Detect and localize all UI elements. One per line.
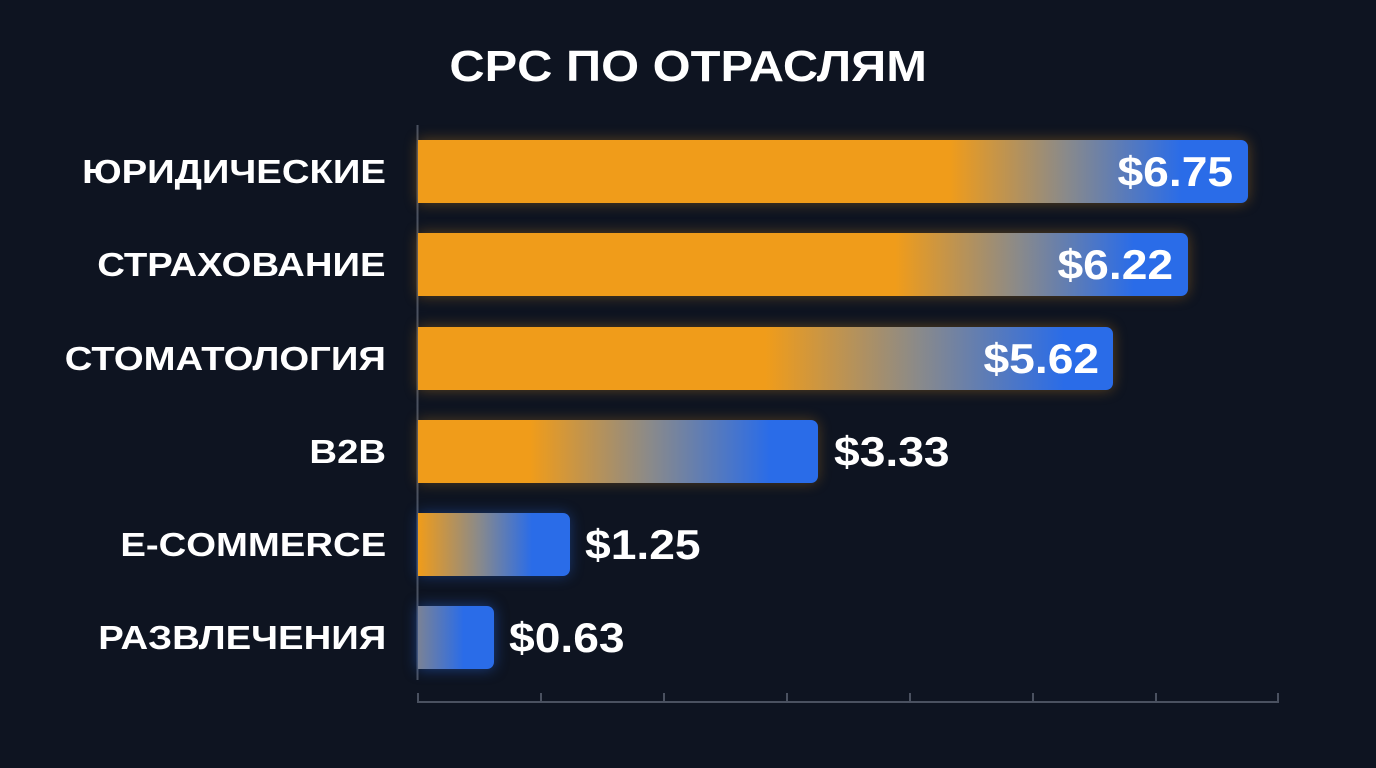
value: 1.25: $1.25 [585, 521, 701, 568]
value: 6.75: $6.75 [1117, 148, 1233, 195]
label: ЮРИДИЧЕСКИЕ: ЮРИДИЧЕСКИЕ [82, 153, 386, 190]
bar: 1.25 [418, 513, 570, 576]
value: 5.62: $5.62 [983, 335, 1099, 382]
bar: 0.63 [418, 606, 494, 669]
bar: 5.62 [418, 327, 1113, 390]
label: СТОМАТОЛОГИЯ: СТОМАТОЛОГИЯ [65, 340, 386, 377]
bar: 6.22 [418, 233, 1188, 296]
label: E-COMMERCE: E-COMMERCE [120, 526, 386, 563]
bar: 6.75 [418, 140, 1248, 203]
value: 6.22: $6.22 [1057, 241, 1173, 288]
title: CPC ПО ОТРАСЛЯМ [449, 42, 927, 91]
value: 0.63: $0.63 [509, 614, 625, 661]
value: 3.33: $3.33 [834, 428, 950, 475]
bar: 3.33 [418, 420, 818, 483]
label: B2B: B2B [309, 433, 386, 470]
label: РАЗВЛЕЧЕНИЯ: РАЗВЛЕЧЕНИЯ [98, 619, 386, 656]
label: СТРАХОВАНИЕ: СТРАХОВАНИЕ [98, 246, 386, 283]
